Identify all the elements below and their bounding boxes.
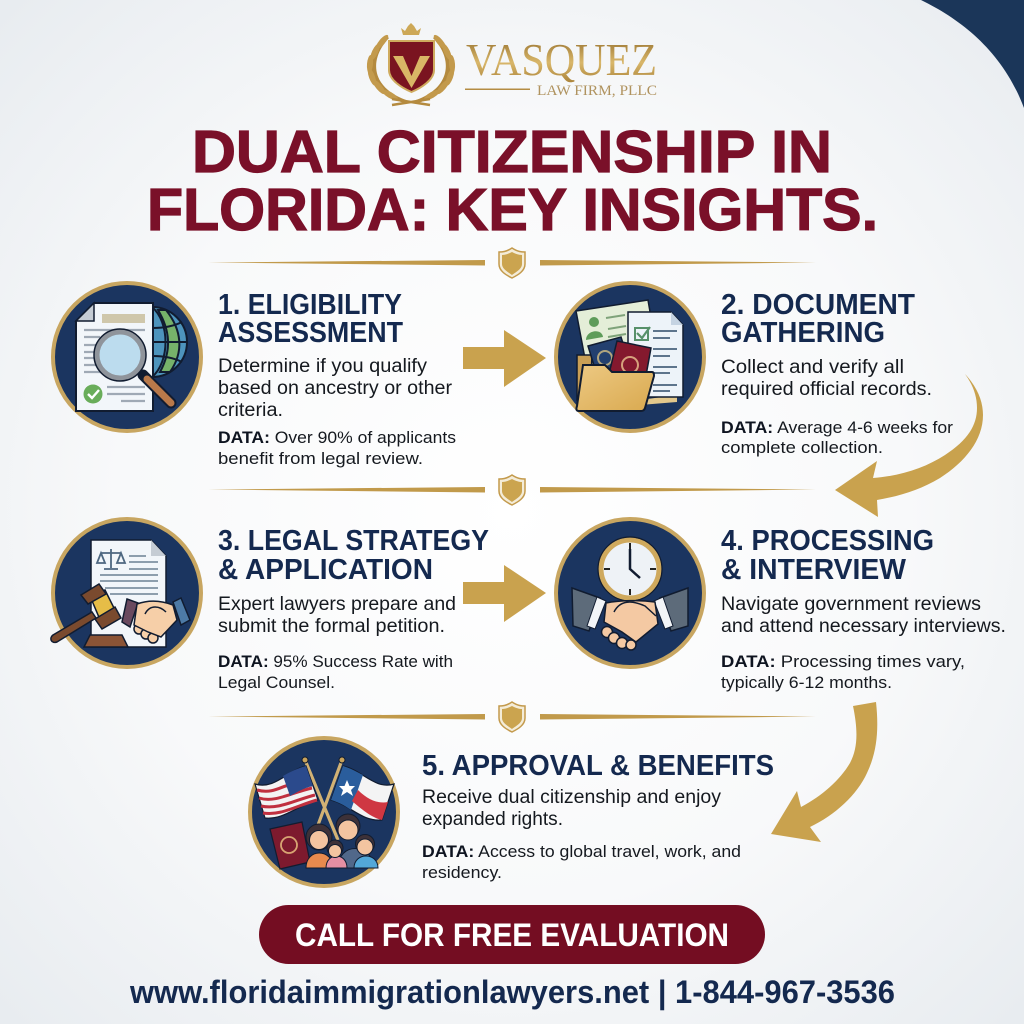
- icon: document and globe: [53, 283, 201, 431]
- logo crown: [401, 23, 421, 35]
- step 2 text: 2. DOCUMENT: [721, 289, 915, 321]
- logo V monogram: [393, 56, 430, 88]
- step 1 text: 1. ELIGIBILITY: [218, 289, 402, 321]
- document: [76, 303, 153, 411]
- call to action button: [259, 905, 765, 964]
- passport: [270, 822, 310, 869]
- step 5 text: DATA: Access to global travel, work, and: [422, 842, 741, 861]
- step 3 text: Expert lawyers prepare and: [218, 594, 456, 615]
- step 1 text: DATA: Over 90% of applicants: [218, 428, 456, 447]
- step 3 text: submit the formal petition.: [218, 616, 445, 637]
- corner accent: [921, 0, 1024, 108]
- step 1 text: benefit from legal review.: [218, 449, 423, 468]
- step 4 text: [721, 525, 1006, 692]
- step 5 text: residency.: [422, 863, 502, 882]
- step 4 text: Navigate government reviews: [721, 594, 981, 615]
- step 3 text: 3. LEGAL STRATEGY: [218, 525, 489, 557]
- arrow: step 1 to 2: [463, 330, 546, 387]
- logo laurel wreath: [366, 33, 456, 105]
- icon: documents folder: [556, 283, 704, 431]
- blue passport: [588, 337, 632, 385]
- step 1 text: ASSESSMENT: [218, 317, 403, 349]
- Texas flag: [331, 766, 394, 820]
- handshake: [602, 601, 658, 650]
- step 5 text: [422, 750, 774, 882]
- divider 3: [208, 702, 816, 732]
- step 4 text: DATA: Processing times vary,: [721, 652, 965, 671]
- scales: [97, 549, 125, 569]
- title: FLORIDA: KEY INSIGHTS.: [147, 177, 878, 243]
- step 2 text: GATHERING: [721, 317, 885, 349]
- icon: clock and handshake: [556, 519, 704, 667]
- step 3 text: & APPLICATION: [218, 554, 433, 586]
- step 2 text: DATA: Average 4-6 weeks for: [721, 418, 953, 437]
- title: DUAL CITIZENSHIP IN: [192, 119, 832, 185]
- step 1 text: criteria.: [218, 400, 283, 421]
- step 3 text: DATA: 95% Success Rate with: [218, 652, 453, 671]
- petition document: [91, 540, 166, 647]
- globe: [117, 307, 187, 377]
- clock: [601, 540, 659, 598]
- call to action button: CALL FOR FREE EVALUATION: [295, 917, 729, 953]
- step 3 text: [218, 525, 489, 692]
- certificate: [576, 300, 660, 385]
- step 4 text: and attend necessary interviews.: [721, 616, 1006, 637]
- step 1 text: based on ancestry or other: [218, 378, 453, 399]
- gavel: [51, 584, 128, 647]
- logo shield: [389, 41, 434, 92]
- folder: [576, 365, 654, 411]
- divider 1: [208, 248, 816, 278]
- arrow: step 3 to 4: [463, 565, 546, 622]
- arrow: step 4 to 5: [771, 702, 877, 842]
- flag poles: [305, 760, 342, 840]
- step 5 text: expanded rights.: [422, 809, 563, 830]
- step 1 text: [218, 289, 456, 468]
- step 2 text: [721, 289, 953, 457]
- logo name: VASQUEZ: [466, 35, 657, 85]
- suits: [572, 588, 688, 631]
- checklist document: [628, 312, 683, 397]
- US flag: [255, 766, 318, 818]
- Texas star: [339, 780, 355, 796]
- step 1 text: Determine if you qualify: [218, 356, 428, 377]
- green check: [84, 384, 102, 404]
- step 2 text: required official records.: [721, 379, 932, 400]
- step 2 text: complete collection.: [721, 438, 883, 457]
- logo rule: [465, 88, 530, 90]
- logo subtitle: LAW FIRM, PLLC: [537, 83, 657, 99]
- icon: gavel, petition, handshake: [51, 519, 201, 667]
- divider 2: [208, 475, 816, 505]
- contact line: www.floridaimmigrationlawyers.net | 1-844-967-3536: [129, 974, 895, 1010]
- step 4 text: & INTERVIEW: [721, 554, 907, 586]
- handshake: [122, 598, 190, 643]
- step 5 text: Receive dual citizenship and enjoy: [422, 787, 722, 808]
- step 3 text: Legal Counsel.: [218, 673, 335, 692]
- icon: flags, passport, family: [250, 738, 398, 886]
- step 5 text: 5. APPROVAL & BENEFITS: [422, 750, 774, 782]
- title: [147, 119, 878, 243]
- red passport: [607, 341, 651, 392]
- step 4 text: typically 6-12 months.: [721, 673, 892, 692]
- logo: [366, 23, 657, 105]
- step 2 text: Collect and verify all: [721, 357, 904, 378]
- step 4 text: 4. PROCESSING: [721, 525, 934, 557]
- family: [306, 814, 378, 868]
- arrow: step 2 to 3: [835, 374, 983, 517]
- magnifier: [143, 375, 171, 403]
- back folder: [577, 355, 592, 400]
